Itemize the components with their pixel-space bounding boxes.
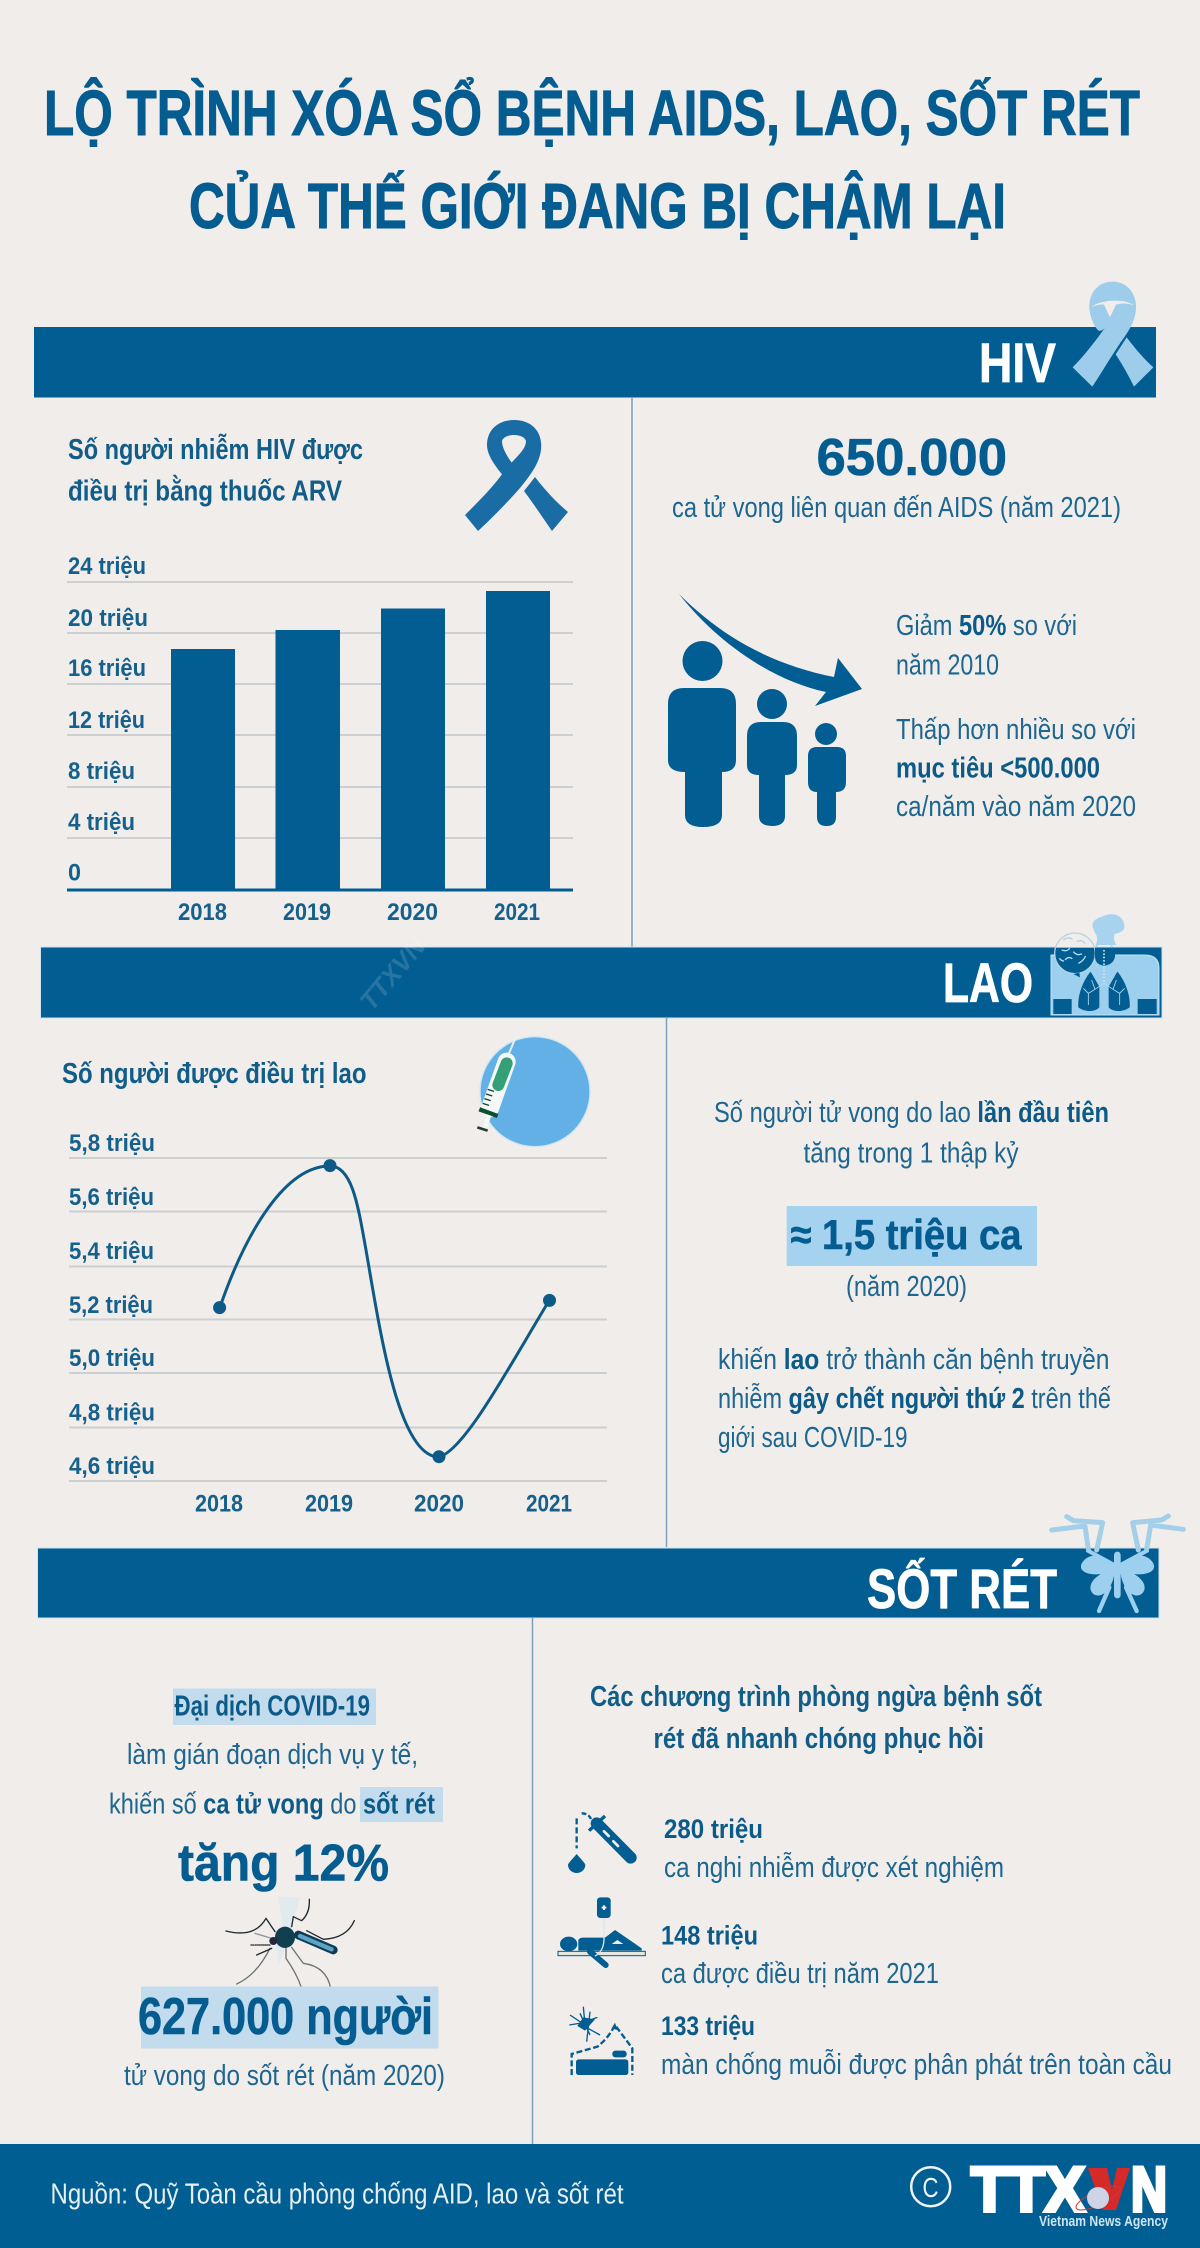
- line chart: people treated for TB: 2021: [526, 1490, 572, 1518]
- line chart: people treated for TB: 2018: [195, 1490, 243, 1518]
- callout: 627,000 people: 627.000 người: [138, 1988, 433, 2046]
- item: tested: ca nghi nhiễm được xét nghiệm: [664, 1852, 1004, 1884]
- line chart: people treated for TB: 4,8 triệu: [69, 1400, 155, 1426]
- stat: AIDS deaths: ca tử vong liên quan đến AIDS (năm 2021): [672, 492, 1121, 524]
- icon: mosquito: [226, 1897, 354, 1988]
- divider: [631, 397, 633, 947]
- line chart: people treated for TB: 2020: [414, 1490, 464, 1518]
- source note: Nguồn: Quỹ Toàn cầu phòng chống AID, lao và sốt rét: [50, 2178, 624, 2210]
- bar chart: people on ARV: [67, 553, 573, 926]
- text block: TB deaths: [714, 1097, 1109, 1170]
- chart heading: ARV treatment: Số người nhiễm HIV được: [68, 434, 363, 466]
- text block: comparison: Giảm 50% so với: [896, 610, 1077, 642]
- item: treated: ca được điều trị năm 2021: [661, 1958, 939, 1990]
- line chart: people treated for TB: 2019: [305, 1490, 353, 1518]
- heading: prevention programs: Các chương trình phòng ngừa bệnh sốt: [590, 1681, 1042, 1713]
- text block: second deadliest: nhiễm gây chết người thứ 2 trên thế: [718, 1383, 1111, 1415]
- callout: 1.5 million cases: ≈ 1,5 triệu ca: [790, 1211, 1022, 1258]
- stat: AIDS deaths: 650.000: [816, 429, 1007, 487]
- stat: increase 12%: tăng 12%: [178, 1834, 389, 1892]
- text block: second deadliest: khiến lao trở thành căn bệnh truyền: [718, 1344, 1110, 1376]
- divider: [666, 1018, 668, 1547]
- divider: [532, 1618, 534, 2144]
- arrow: downward trend: [679, 594, 862, 706]
- item: nets: [661, 2011, 1172, 2081]
- bar chart: people on ARV: 2020: [387, 899, 438, 926]
- item: nets: 133 triệu: [661, 2011, 755, 2041]
- item: tested: [664, 1814, 1004, 1884]
- text block: second deadliest: [718, 1344, 1111, 1454]
- bar chart: people on ARV: 2018: [178, 899, 227, 926]
- icon: light blue mosquito: [1052, 1516, 1183, 1611]
- bar chart: people on ARV: 2021: [494, 899, 540, 926]
- bar chart: people on ARV: 12 triệu: [68, 707, 145, 734]
- text block: comparison: Thấp hơn nhiều so với: [896, 714, 1136, 746]
- text block: COVID-19 disruption: làm gián đoạn dịch vụ y tế,: [127, 1739, 418, 1771]
- item: tested: 280 triệu: [664, 1814, 763, 1844]
- icon: dark blue ribbon: [465, 420, 568, 531]
- callout: 627,000 people: tử vong do sốt rét (năm 2020): [124, 2060, 445, 2092]
- callout: 1.5 million cases: [787, 1206, 1037, 1303]
- panel: LAO: [40, 914, 1162, 1547]
- icon: lungs and head: [1051, 914, 1159, 1015]
- heading: prevention programs: [590, 1681, 1042, 1755]
- text block: COVID-19 disruption: Đại dịch COVID-19: [174, 1690, 370, 1722]
- line chart: people treated for TB: 4,6 triệu: [69, 1453, 155, 1480]
- text block: COVID-19 disruption: [109, 1688, 443, 1822]
- panel: HIV: [34, 282, 1156, 947]
- malaria section band: [38, 1548, 1159, 1618]
- panel: SỐT RÉT: [38, 1516, 1183, 2144]
- LAO section band: [40, 947, 1162, 1018]
- title: [44, 76, 1140, 242]
- callout: 627,000 people: [124, 1986, 445, 2092]
- bar chart: people on ARV: 0: [68, 860, 81, 886]
- callout: 1.5 million cases: (năm 2020): [846, 1271, 967, 1303]
- LAO heading: LAO: [943, 951, 1033, 1014]
- item: treated: [661, 1920, 939, 1990]
- text block: comparison: mục tiêu <500.000: [896, 752, 1100, 784]
- logo: TTXVN: TTX: [971, 2155, 1085, 2225]
- bar chart: people on ARV: 4 triệu: [68, 809, 135, 836]
- text block: comparison: năm 2010: [896, 650, 999, 682]
- logo: TTXVN: [971, 2155, 1168, 2230]
- line chart: people treated for TB: 5,0 triệu: [69, 1345, 155, 1372]
- malaria heading: SỐT RÉT: [867, 1557, 1057, 1620]
- bar chart: people on ARV: 16 triệu: [68, 655, 146, 682]
- bar chart: people on ARV: 24 triệu: [68, 553, 146, 580]
- icon: three people: [668, 641, 846, 827]
- heading: prevention programs: rét đã nhanh chóng phục hồi: [654, 1723, 984, 1755]
- text block: TB deaths: Số người tử vong do lao lần đầu tiên: [714, 1097, 1109, 1129]
- item: treated: 148 triệu: [661, 1920, 758, 1950]
- stat: AIDS deaths: [672, 429, 1121, 524]
- text block: second deadliest: giới sau COVID-19: [718, 1422, 908, 1454]
- logo: TTXVN: Vietnam News Agency: [1039, 2214, 1168, 2230]
- bar chart: people on ARV: 20 triệu: [68, 605, 148, 632]
- bar chart: people on ARV: 2019: [283, 899, 331, 926]
- HIV section band: [34, 327, 1156, 398]
- text block: comparison: [896, 610, 1136, 823]
- icon: copyright: [911, 2167, 950, 2206]
- panel: LAO: TTXVN: [354, 931, 432, 1016]
- HIV heading: HIV: [979, 331, 1056, 394]
- line chart: people treated for TB: 5,2 triệu: [69, 1292, 153, 1319]
- bar chart: people on ARV: 8 triệu: [68, 758, 135, 785]
- icon: bed net and mosquito: [569, 2007, 632, 2075]
- line chart: people treated for TB: [69, 1130, 607, 1518]
- icon: light blue ribbon: [1073, 282, 1153, 387]
- text block: COVID-19 disruption: khiến số ca tử vong do sốt rét: [109, 1788, 435, 1820]
- text block: TB deaths: tăng trong 1 thập kỷ: [804, 1138, 1019, 1170]
- line chart: people treated for TB: 5,6 triệu: [69, 1184, 154, 1211]
- icon: copyright: C: [922, 2172, 938, 2203]
- icon: syringe on blue circle: [477, 1029, 590, 1147]
- footer: [0, 2144, 1200, 2248]
- chart heading: TB treatment: Số người được điều trị lao: [62, 1058, 366, 1090]
- logo: TTXVN: N: [1131, 2155, 1167, 2225]
- text block: comparison: ca/năm vào năm 2020: [896, 791, 1136, 823]
- line chart: people treated for TB: 5,8 triệu: [69, 1130, 155, 1157]
- icon: patient with IV: [558, 1897, 645, 1965]
- icon: test tube and drop: [568, 1813, 631, 1873]
- chart heading: ARV treatment: [68, 434, 363, 508]
- chart heading: ARV treatment: điều trị bằng thuốc ARV: [68, 476, 342, 508]
- line chart: people treated for TB: 5,4 triệu: [69, 1238, 154, 1265]
